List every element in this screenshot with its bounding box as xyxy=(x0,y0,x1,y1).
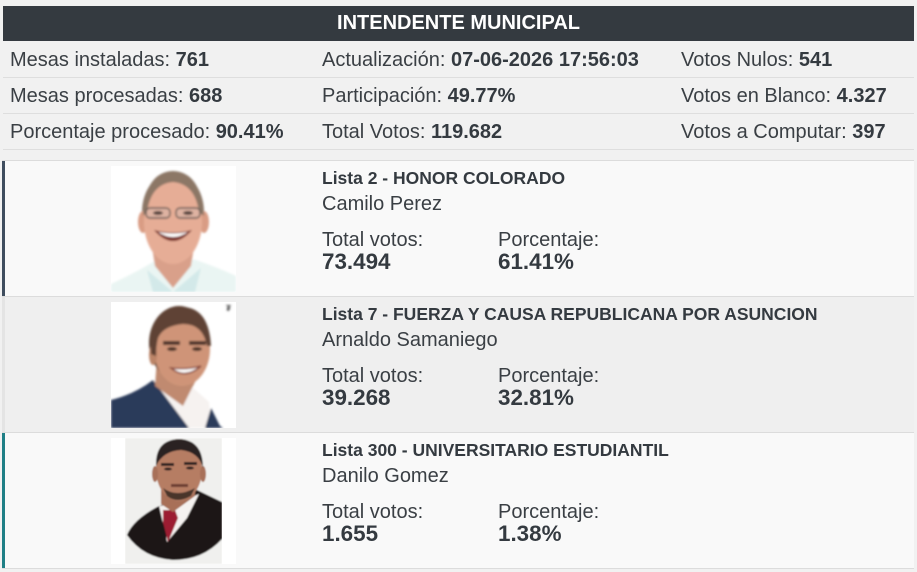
stat: participacion: Participación: 49.77% xyxy=(322,85,515,107)
panel: candidate Camilo Perez xyxy=(2,160,914,296)
candidate name: Camilo Perez xyxy=(322,193,442,215)
percentage xyxy=(498,365,599,410)
stat: votos nulos: Votos Nulos: 541 xyxy=(681,49,832,71)
title: INTENDENTE MUNICIPAL xyxy=(337,12,580,34)
percentage: Porcentaje: xyxy=(498,365,599,387)
total votes: Total votos: xyxy=(322,501,423,523)
total votes xyxy=(322,365,423,410)
stat: mesas instaladas: Mesas instaladas: 761 xyxy=(10,49,209,71)
photo: Danilo Gomez xyxy=(126,438,222,563)
panel: candidate Arnaldo Samaniego xyxy=(2,296,914,432)
photo: Camilo Perez xyxy=(112,170,236,292)
total votes: Total votos: xyxy=(322,229,423,251)
party name: Lista 7 - FUERZA Y CAUSA REPUBLICANA POR ASUNCION xyxy=(322,304,818,324)
stat: votos a computar: Votos a Computar: 397 xyxy=(681,121,886,143)
stat: total votos: Total Votos: 119.682 xyxy=(322,121,502,143)
photo: Arnaldo Samaniego xyxy=(111,302,236,428)
percentage: Porcentaje: xyxy=(498,229,599,251)
party name: Lista 300 - UNIVERSITARIO ESTUDIANTIL xyxy=(322,440,669,460)
percentage: Porcentaje: xyxy=(498,501,599,523)
percentage: 61.41% xyxy=(498,249,574,274)
percentage xyxy=(498,229,599,274)
total votes: Total votos: xyxy=(322,365,423,387)
total votes: 73.494 xyxy=(322,249,390,274)
candidate name: Danilo Gomez xyxy=(322,465,449,487)
photo: Arnaldo Samaniego: ₮ xyxy=(226,304,231,313)
stat: porcentaje procesado: Porcentaje procesado: 90.41% xyxy=(10,121,284,143)
stat: mesas procesadas: Mesas procesadas: 688 xyxy=(10,85,222,107)
stat: votos en blanco: Votos en Blanco: 4.327 xyxy=(681,85,887,107)
stats table xyxy=(3,49,914,150)
total votes: 39.268 xyxy=(322,385,390,410)
title xyxy=(3,6,914,41)
total votes: 1.655 xyxy=(322,521,378,546)
total votes xyxy=(322,501,423,546)
percentage xyxy=(498,501,599,546)
stat: actualizacion: Actualización: 07-06-2026 17:56:03 xyxy=(322,49,639,71)
panel: candidate Danilo Gomez xyxy=(2,432,914,569)
percentage: 32.81% xyxy=(498,385,574,410)
percentage: 1.38% xyxy=(498,521,562,546)
total votes xyxy=(322,229,423,274)
party name: Lista 2 - HONOR COLORADO xyxy=(322,168,565,188)
candidate name: Arnaldo Samaniego xyxy=(322,329,498,351)
